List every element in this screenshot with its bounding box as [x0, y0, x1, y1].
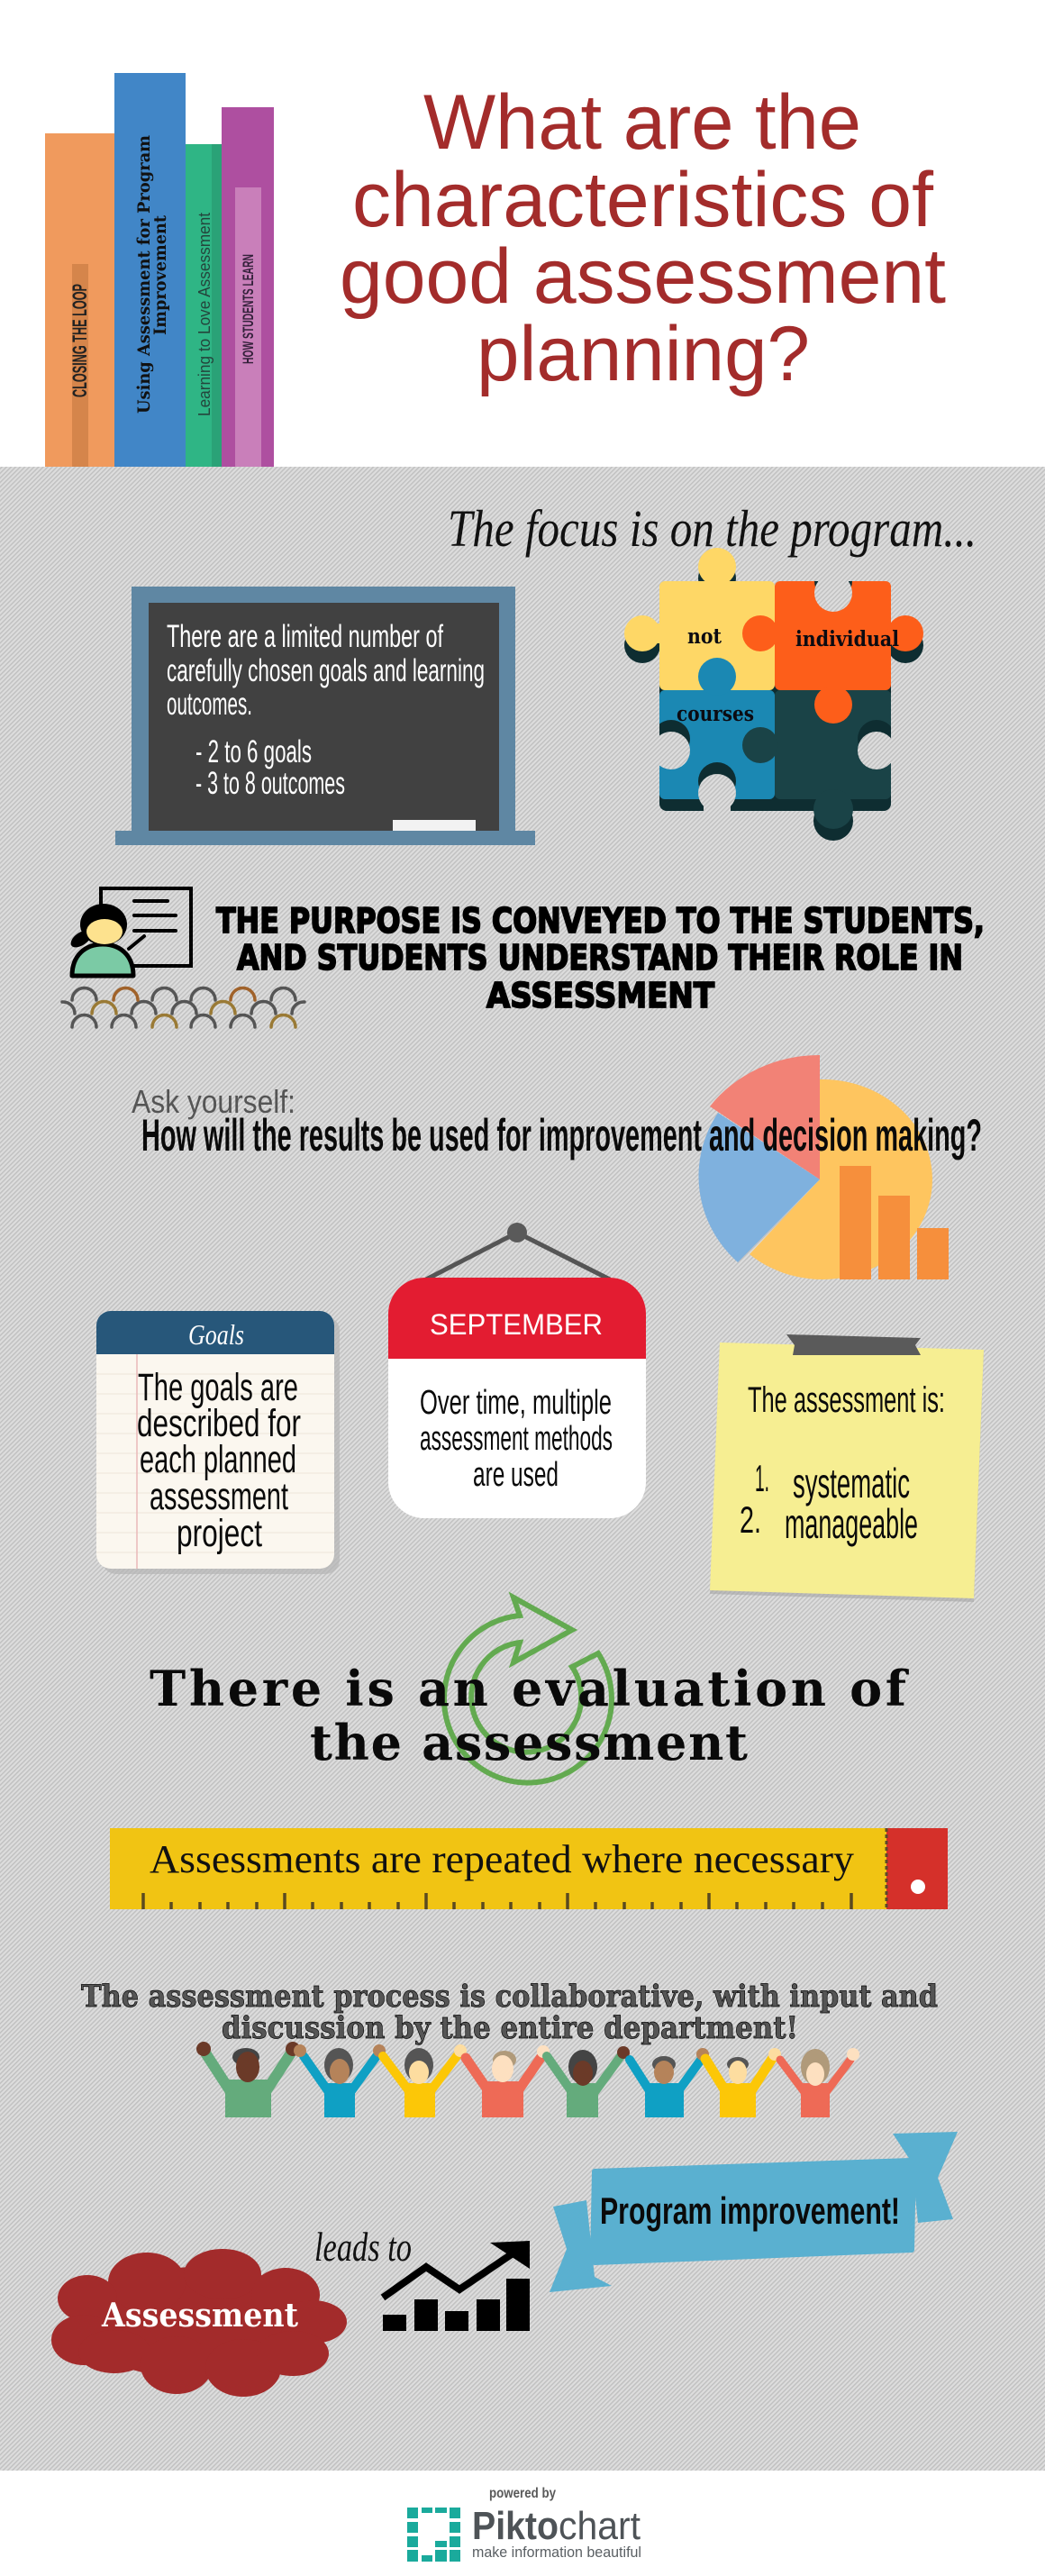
book: Learning to Love Assessment: Learning to Love Assessment [195, 213, 214, 416]
calendar card: september: SEPTEMBER [430, 1308, 603, 1341]
title: characteristics of [352, 157, 934, 243]
icon: green cycle arrow [444, 1597, 612, 1783]
goals text: each planned [140, 1438, 296, 1481]
teacher figure [68, 904, 133, 976]
title: good assessment [340, 233, 946, 320]
heading: evaluation of the assessment: There is an evaluation of [150, 1660, 910, 1717]
sticky note text: systematic [793, 1460, 910, 1506]
calendar card: september [388, 1223, 646, 1518]
puzzle shadow [624, 560, 923, 841]
heading: collaborative process: The assessment process is collaborative, with input and [81, 1979, 938, 2015]
blue piece [652, 658, 775, 813]
footer text: powered by: powered by [489, 2486, 556, 2501]
chalkboard text: There are a limited number of [167, 619, 443, 654]
heading: collaborative process [81, 1979, 938, 2046]
notebook card: goals: Goals [188, 1318, 244, 1351]
title: planning? [477, 311, 810, 397]
person 2 [294, 2044, 386, 2117]
person 6 [630, 2048, 709, 2117]
goals text: assessment [150, 1475, 288, 1518]
sticky note text [740, 1380, 945, 1547]
goals text: The goals are [138, 1366, 298, 1409]
book: Closing the Loop [45, 133, 114, 467]
person 7 [705, 2048, 781, 2117]
chalkboard text [167, 619, 485, 801]
ruler ticks [143, 1893, 851, 1909]
heading: purpose conveyed to students [216, 901, 985, 1015]
icon: row of people with raised arms [196, 2042, 859, 2117]
ribbon banner: program improvement: Program improvement! [600, 2189, 900, 2232]
audience arcs [62, 988, 304, 1027]
sticky note text: 1. [755, 1457, 769, 1499]
chalkboard text: - 2 to 6 goals [195, 734, 312, 769]
book: Using Assessment for Program Improvement [114, 73, 186, 467]
notebook card: goals [96, 1311, 340, 1574]
person 4 [466, 2045, 550, 2117]
calendar text: Over time, multiple [420, 1384, 612, 1422]
icon: piktochart logo [407, 2508, 460, 2562]
striped grey background panel [0, 467, 1045, 2471]
sticky note text: manageable [785, 1500, 918, 1547]
cloud: assessment [51, 2249, 347, 2397]
text: ask yourself: Ask yourself: [132, 1083, 295, 1120]
puzzle labels: courses [677, 702, 754, 726]
chalkboard text: - 3 to 8 outcomes [195, 766, 345, 801]
book: Learning to Love Assessment [186, 144, 222, 467]
book: Using Assessment for Program Improvement: Improvement [150, 215, 170, 335]
puzzle labels: not [687, 624, 722, 649]
dark teal piece [742, 686, 895, 829]
sticky note text: 2. [740, 1498, 761, 1541]
heading: evaluation of the assessment [150, 1660, 910, 1771]
calendar text: assessment methods [420, 1420, 613, 1458]
person 1 [196, 2042, 300, 2117]
footer panel [0, 2471, 1045, 2576]
ruler banner [110, 1828, 948, 1909]
calendar text [420, 1384, 613, 1494]
icon: rising bar chart with arrow [383, 2241, 530, 2331]
chalkboard text: outcomes. [167, 687, 252, 722]
ribbon banner: program improvement [550, 2132, 958, 2292]
person 8 [780, 2048, 859, 2117]
heading: evaluation of the assessment: the assessment [310, 1714, 748, 1771]
goals text [137, 1366, 301, 1555]
book: How Students Learn: HOW STUDENTS LEARN [240, 254, 257, 364]
orange piece [742, 581, 923, 690]
goals text: project [177, 1512, 262, 1555]
book: How Students Learn [222, 107, 274, 467]
yellow piece [624, 548, 775, 690]
ruler banner: Assessments are repeated where necessary [150, 1837, 854, 1881]
chalkboard panel [115, 587, 535, 845]
text: leads to: leads to [314, 2224, 412, 2270]
icon: teacher at board with audience [62, 888, 304, 1027]
presentation board [101, 888, 191, 966]
cloud: assessment: Assessment [101, 2297, 298, 2335]
logo wordmark: piktochart: Piktochart [472, 2504, 641, 2548]
heading: collaborative process: discussion by the entire department! [222, 2010, 798, 2046]
puzzle labels [677, 624, 899, 726]
book: Closing the Loop: CLOSING THE LOOP [68, 284, 91, 397]
calendar text: are used [473, 1456, 559, 1494]
book: Using Assessment for Program Improvement: Using Assessment for Program [134, 135, 154, 414]
person 3 [383, 2044, 467, 2117]
title [340, 79, 946, 397]
chalkboard text: carefully chosen goals and learning [167, 653, 485, 688]
logo tagline: make information beautiful [472, 2544, 641, 2561]
goals text: described for [137, 1402, 301, 1445]
icon: jigsaw puzzle [624, 548, 923, 841]
sticky note: the assessment is [710, 1334, 984, 1602]
heading: purpose conveyed to students: ASSESSMENT [486, 976, 714, 1015]
puzzle labels: individual [795, 627, 899, 651]
chart: pie and bars [698, 1055, 949, 1279]
icon: row of books [45, 73, 274, 467]
person 5 [547, 2046, 630, 2117]
title: What are the [423, 79, 861, 166]
